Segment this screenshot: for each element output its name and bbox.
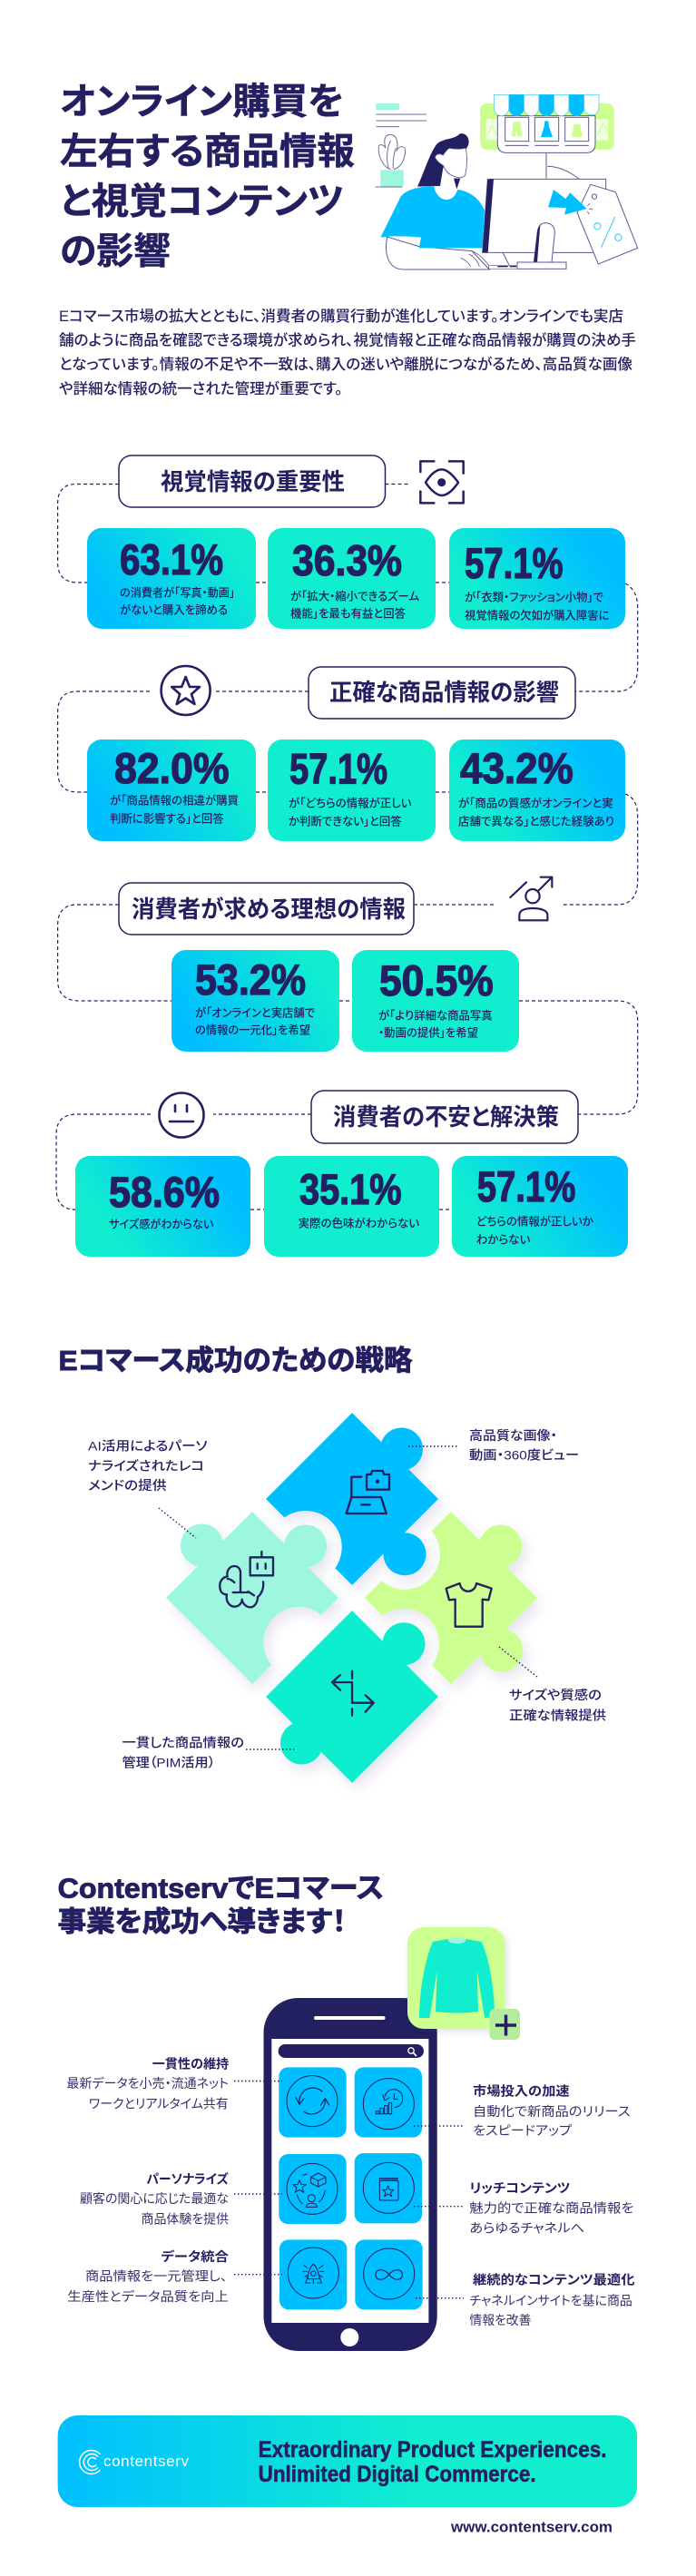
panel: stat 53.2%: 53.2% (195, 955, 306, 1004)
footer banner (58, 2415, 637, 2507)
panel: stat 63.1%: 63.1% (120, 535, 223, 583)
app: time to market (355, 2067, 422, 2138)
title: 左右する商品情報 (60, 131, 355, 172)
panel: stat 50.5%: 50.5% (379, 956, 494, 1004)
phone illustration (263, 1998, 437, 2351)
panel: stat 82.0%: が「商品情報の相違が購買 (110, 794, 239, 808)
panel: stat 58.6% (75, 1156, 250, 1257)
tagline: Unlimited Digital Commerce. (259, 2462, 536, 2487)
dashed connector path (56, 485, 638, 1210)
label: AI recommendations (88, 1439, 208, 1538)
chart: puzzle strategy diagram (88, 1413, 606, 1783)
app: sync (279, 2067, 347, 2138)
callout: personalize: 顧客の関心に応じた最適な (80, 2191, 229, 2206)
callout: personalize (80, 2171, 282, 2226)
panel: stat 36.3% (268, 528, 436, 629)
app icons (279, 2067, 423, 2309)
icon: brain and robot (220, 1552, 273, 1607)
tagline (259, 2437, 607, 2487)
label: AI recommendations: メンドの提供 (88, 1479, 167, 1494)
callout: consistency (66, 2057, 282, 2111)
icon: notes and lines (376, 103, 426, 127)
callout: continuous optimization: 情報を改善 (469, 2313, 531, 2327)
callout: consistency: 最新データを小売・流通ネット (66, 2076, 229, 2091)
panel: stat 57.1% second (268, 739, 436, 841)
panel: stat 36.3%: が「拡大・縮小できるズーム (290, 590, 419, 603)
icon: eye (420, 461, 464, 503)
text block: intro (59, 308, 636, 397)
panel: stat 43.2%: 店舗で異なる」と感じた経験あり (458, 815, 614, 828)
panel: stat 53.2%: が「オンラインと実店舗で (195, 1006, 315, 1020)
panel: stat 35.1%: 実際の色味がわからない (299, 1217, 419, 1230)
callout: consistency: 一貫性の維持 (152, 2057, 229, 2072)
puzzle piece: mint (166, 1512, 338, 1684)
panel: stat 57.1% third: どちらの情報が正しいか (476, 1215, 594, 1229)
panel: stat 57.1% (449, 528, 625, 629)
panel: stat 63.1%: がないと購入を諦める (120, 603, 228, 617)
website url: www.contentserv.com (450, 2519, 613, 2536)
callout: data integration: 生産性とデータ品質を向上 (67, 2289, 229, 2304)
panel: ideal information heading (119, 883, 414, 935)
panel: stat 57.1% second: が「どちらの情報が正しい (289, 797, 412, 810)
panel: stat 57.1% third: 57.1% (477, 1162, 575, 1210)
logo: contentserv (80, 2451, 189, 2473)
panel: stat 43.2%: 43.2% (460, 744, 573, 792)
panel: accurate product information heading: 正確な商品情報の影響 (329, 679, 559, 706)
icon: camera and laptop (347, 1471, 389, 1513)
text block: intro: や詳細な情報の統一された管理が重要です。 (59, 380, 342, 397)
label: AI recommendations: ナライズされたレコ (88, 1458, 204, 1474)
label: consistent product info: 管理（PIM活用） (122, 1755, 215, 1770)
text block: intro: Eコマース市場の拡大とともに、消費者の購買行動が進化しています。オンラインでも実店 (59, 308, 623, 325)
heading: contentserv: 事業を成功へ導きます！ (58, 1905, 347, 1938)
icon: plus badge (489, 2009, 520, 2040)
panel: stat 35.1% (264, 1156, 439, 1257)
title: オンライン購買を (60, 80, 344, 122)
callout: continuous optimization: チャネルインサイトを基に商品 (469, 2293, 632, 2307)
label: high quality images: 動画・360度ビュー (469, 1448, 579, 1463)
app: rich content (355, 2153, 422, 2223)
puzzle piece: teal (266, 1611, 438, 1783)
panel: anxieties and solutions heading: 消費者の不安と解決策 (333, 1103, 559, 1131)
panel: accurate product information heading (309, 667, 575, 719)
icon: route arrows (332, 1671, 374, 1716)
panel: stat 82.0%: 判断に影響する」と回答 (110, 812, 224, 826)
panel: stat 57.1% second: か判断できない」と回答 (289, 815, 402, 828)
panel: stat 53.2%: の情報の一元化」を希望 (195, 1024, 310, 1037)
product card: shirt (407, 1927, 520, 2040)
callout: rich content: あらゆるチャネルへ (469, 2220, 584, 2235)
panel: stat 36.3%: 36.3% (292, 536, 402, 584)
callout: faster market launch: をスピードアップ (473, 2123, 572, 2138)
app: rocket (279, 2239, 347, 2309)
panel: stat 63.1%: の消費者が「写真・動画」 (120, 586, 235, 600)
panel: stat 57.1% third: わからない (476, 1234, 530, 1247)
label: size and texture: 正確な情報提供 (509, 1709, 606, 1723)
label: size and texture: サイズや質感の (509, 1688, 602, 1703)
panel: stat 50.5% (352, 950, 519, 1052)
panel: stat 82.0% (87, 739, 256, 841)
icon: cursor arrows (548, 190, 593, 215)
phone body (263, 1998, 437, 2351)
panel: stat 58.6%: 58.6% (109, 1168, 220, 1216)
panel: stat 82.0%: 82.0% (114, 744, 230, 792)
panel: stat 57.1%: 57.1% (465, 539, 564, 587)
title: と視覚コンテンツ (60, 180, 344, 221)
panel: stat 43.2%: が「商品の質感がオンラインと実 (458, 797, 613, 810)
heading: contentserv: ContentservでEコマース (58, 1873, 384, 1904)
callout: faster market launch: 自動化で新商品のリリース (473, 2104, 631, 2119)
icon: browser panel (480, 103, 614, 150)
icon: plant (375, 134, 406, 187)
callout: personalize: 商品体験を提供 (142, 2211, 229, 2226)
panel: stat 57.1% second: 57.1% (289, 744, 387, 792)
panel: ideal information heading: 消費者が求める理想の情報 (132, 896, 406, 923)
callout: rich content: 魅力的で正確な商品情報を (469, 2201, 633, 2216)
label: high quality images: 高品質な画像・ (469, 1428, 557, 1444)
panel: stat 50.5%: ・動画の提供」を希望 (378, 1026, 478, 1040)
panel: stat 58.6%: サイズ感がわからない (109, 1218, 213, 1231)
callout: data integration: データ統合 (162, 2249, 229, 2265)
panel: stat 35.1%: 35.1% (299, 1165, 401, 1213)
icon: star (162, 666, 211, 715)
app: infinity (355, 2239, 423, 2309)
icon: awning (494, 94, 599, 116)
panel: stat 57.1%: 視覚情報の欠如が購入障害に (465, 609, 609, 622)
puzzle piece: blue (266, 1413, 438, 1585)
icon: store box (497, 116, 595, 152)
panel: visual information heading: 視覚情報の重要性 (161, 468, 345, 495)
panel: stat 63.1% (87, 528, 256, 629)
callout: faster market launch (414, 2084, 631, 2138)
panel: stat 53.2% (172, 950, 339, 1052)
label: size and texture (499, 1647, 606, 1723)
label: consistent product info (122, 1735, 294, 1770)
callout: faster market launch: 市場投入の加速 (473, 2084, 570, 2100)
puzzle piece: green (365, 1512, 537, 1684)
callout: continuous optimization: 継続的なコンテンツ最適化 (473, 2273, 635, 2288)
callout: continuous optimization (416, 2273, 635, 2327)
panel: stat 43.2% (449, 739, 625, 841)
callout: consistency: ワークとリアルタイム共有 (89, 2096, 229, 2111)
app: personalize (279, 2154, 347, 2224)
icon: long sleeve shirt (419, 1937, 495, 2018)
panel: stat 57.1% third (452, 1156, 628, 1257)
panel: stat 50.5%: が「より詳細な商品写真 (378, 1009, 493, 1023)
heading: contentserv (58, 1873, 384, 1938)
label: consistent product info: 一貫した商品情報の (122, 1735, 244, 1750)
callout: rich content (414, 2181, 633, 2235)
icon: neutral face (160, 1092, 203, 1138)
icon: pole and cable (546, 152, 594, 196)
tagline: Extraordinary Product Experiences. (259, 2437, 607, 2463)
text block: intro: となっています。情報の不足や不一致は、購入の迷いや離脱につながるため、高品質な画像 (59, 356, 632, 373)
search bar (279, 2044, 424, 2058)
panel: stat 57.1%: が「衣類・ファッション小物」で (465, 591, 603, 604)
logo: contentserv: contentserv (103, 2453, 189, 2470)
callout: data integration (67, 2249, 282, 2304)
text block: intro: 舗のように商品を確認できる環境が求められ、視覚情報と正確な商品情報が購買の決め手 (59, 332, 636, 348)
label: AI recommendations: AI活用によるパーソ (88, 1439, 208, 1454)
label: high quality images (408, 1428, 579, 1463)
callout: rich content: リッチコンテンツ (469, 2181, 570, 2196)
panel: visual information heading (119, 455, 385, 507)
callout: data integration: 商品情報を一元管理し、 (85, 2268, 227, 2283)
icon: person growth (510, 877, 552, 920)
icon: t-shirt (446, 1583, 492, 1627)
title (60, 80, 355, 272)
panel: anxieties and solutions heading (311, 1091, 578, 1143)
heading: strategy: Eコマース成功のための戦略 (58, 1345, 412, 1376)
icon: person (380, 133, 489, 269)
callout: personalize: パーソナライズ (146, 2171, 229, 2187)
title: の影響 (60, 230, 171, 272)
icon: price tag (577, 184, 638, 264)
icon: monitor (483, 179, 606, 269)
illustration: shopper at monitor with storefront (375, 94, 638, 269)
panel: stat 36.3%: 機能」を最も有益と回答 (290, 607, 407, 621)
